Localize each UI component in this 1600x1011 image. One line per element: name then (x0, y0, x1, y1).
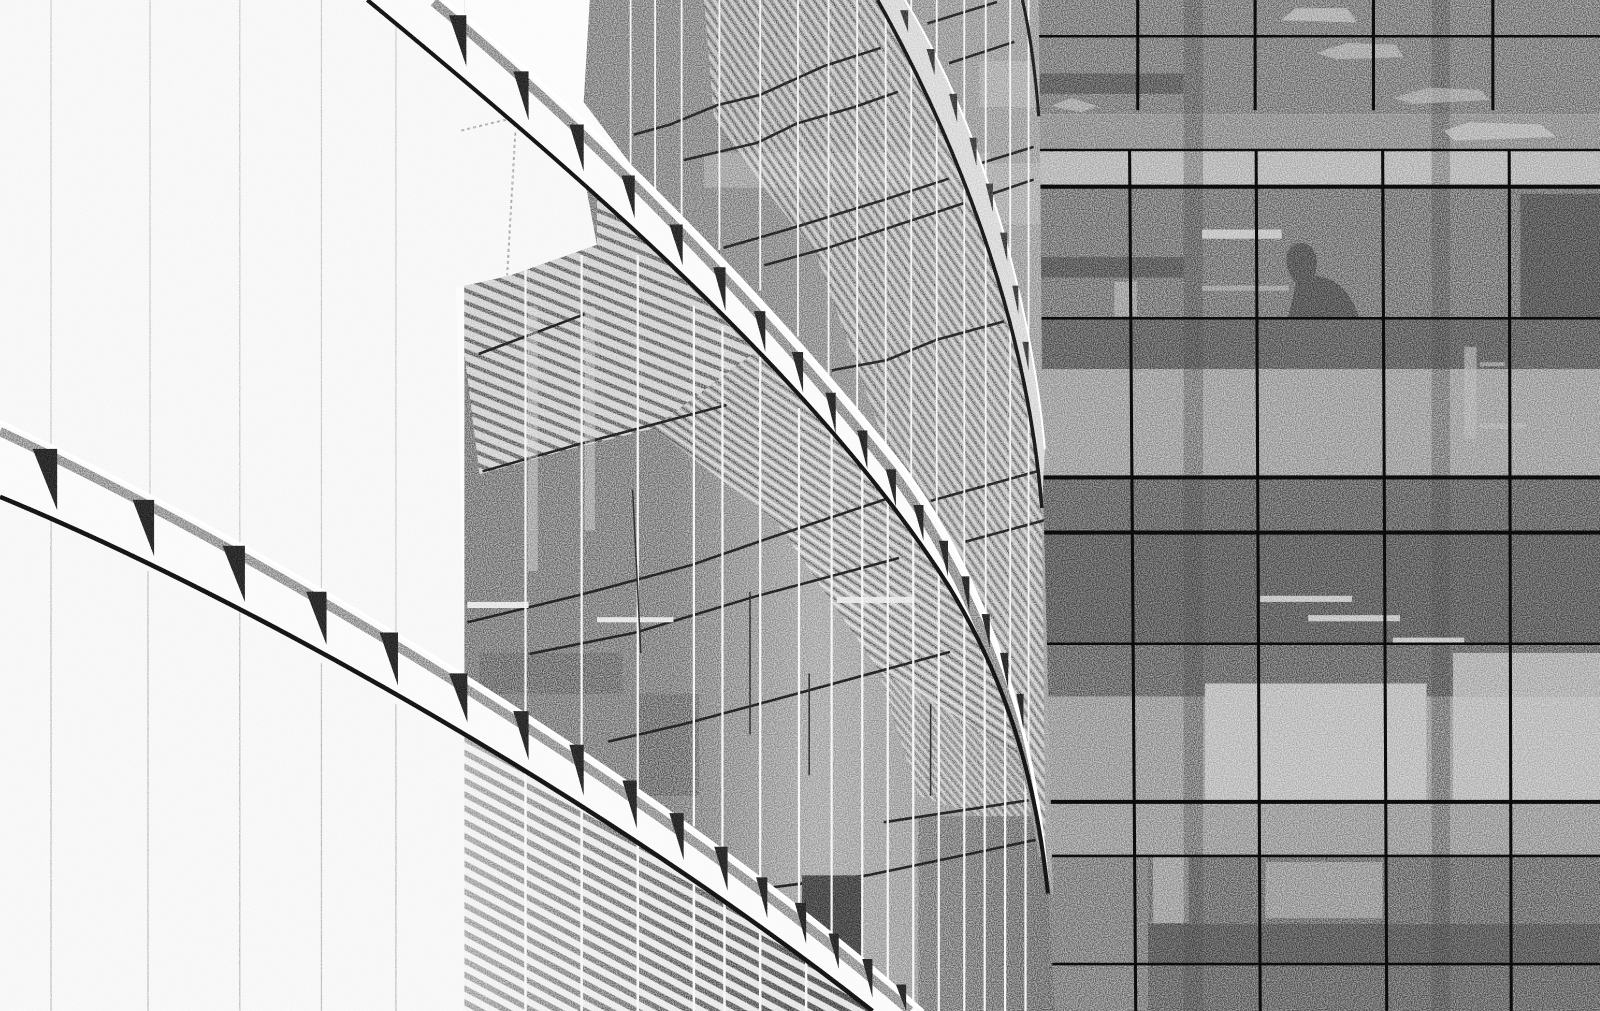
reflected tower louvres near upper left (456, 194, 755, 474)
lower curved ledge (0, 421, 923, 1011)
bright top edge (0, 421, 923, 1011)
dark interior block (1520, 194, 1600, 318)
black bottom edge (0, 497, 872, 1011)
bright top edge (444, 0, 1048, 894)
darker lower reflection panels (480, 653, 1056, 1011)
faint reflected tower in white panel (461, 117, 515, 275)
person silhouette at desk (1286, 243, 1359, 318)
diagonal louvres centre (653, 352, 1020, 755)
desk and equipment highlights (1114, 282, 1526, 439)
shaded soffit strip (0, 432, 910, 1011)
far ledge brackets (900, 10, 1029, 370)
dark vertical streaks (633, 490, 931, 796)
light reflections (467, 596, 912, 622)
black bottom edge (367, 0, 1048, 894)
main curved ledge (367, 0, 1048, 894)
reflected window lines (467, 314, 1052, 888)
vertical mullions (631, 0, 1029, 775)
lower left white facade panel (0, 497, 872, 1011)
soft wide mullions (533, 306, 590, 571)
window frame lines (1036, 0, 1600, 1011)
upper glass curtain wall (584, 0, 1053, 898)
reflected light bands (704, 61, 1041, 224)
reflected dark window lines (634, 2, 1052, 542)
diagonal louvres bottom right (878, 668, 1031, 816)
interior column left (1184, 0, 1203, 1011)
ceiling lights (1051, 8, 1556, 643)
dark lower reflections (802, 875, 864, 958)
upper left white facade panel (0, 0, 597, 673)
window bands (1031, 0, 1600, 1011)
right office building (1031, 0, 1600, 1011)
interior column right (1432, 0, 1450, 1011)
shaded soffit strip (434, 2, 1043, 857)
striped glass lower section (464, 737, 869, 1011)
pale vertical seams upper panel (51, 0, 396, 638)
diagonal louvres (704, 0, 1046, 877)
pale vertical seams lower panel (51, 520, 396, 1011)
lower glass curtain wall (456, 0, 1056, 1011)
ledge brackets (33, 449, 906, 1011)
ledge brackets (449, 15, 1023, 729)
vertical mullions (526, 255, 1026, 1011)
far upper curved ledge (878, 0, 1045, 508)
